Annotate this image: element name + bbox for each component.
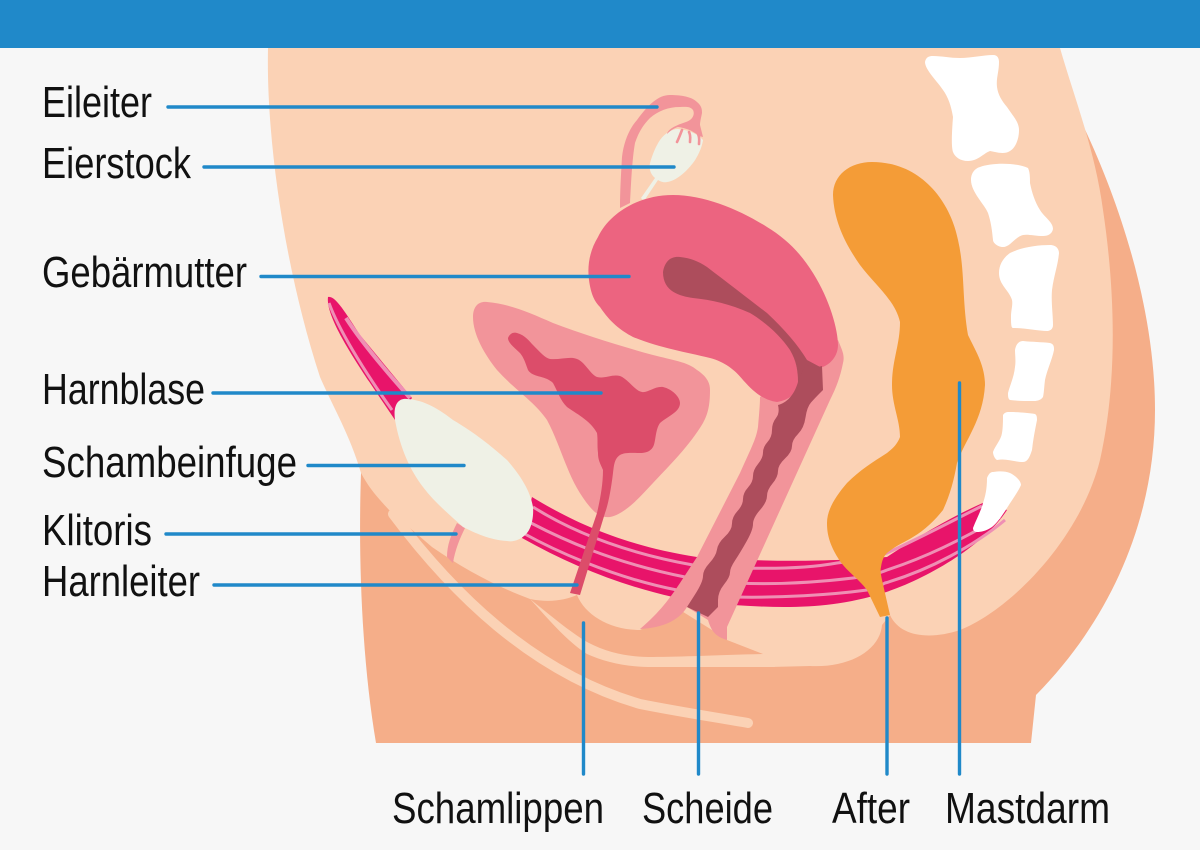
spine bbox=[925, 55, 1059, 532]
fallopian fringes bbox=[677, 130, 699, 144]
label: Klitoris: Klitoris bbox=[42, 506, 152, 555]
label: Mastdarm: Mastdarm bbox=[945, 784, 1110, 833]
rectum bbox=[827, 162, 985, 617]
vagina wall bbox=[640, 340, 844, 640]
leader: Schambeinfuge bbox=[308, 464, 464, 467]
header bar bbox=[0, 0, 1200, 48]
vertebra 5 bbox=[993, 412, 1037, 462]
leader: Harnblase bbox=[213, 391, 601, 395]
label: Harnblase: Harnblase bbox=[42, 365, 205, 414]
leader lines bbox=[166, 107, 960, 774]
leader: Scheide bbox=[697, 613, 700, 774]
body: outer tissue bbox=[360, 115, 1155, 743]
clitoris bbox=[447, 523, 465, 563]
label: Eileiter: Eileiter bbox=[42, 78, 152, 127]
muscle stripes bbox=[523, 506, 1005, 597]
pubic symphysis bbox=[395, 399, 533, 541]
coccyx bbox=[973, 471, 1021, 532]
label: Scheide: Scheide bbox=[642, 784, 773, 833]
body cross-section bbox=[268, 48, 1155, 743]
leader: After bbox=[885, 618, 889, 774]
vertebra 4 bbox=[1008, 341, 1054, 401]
label: Schambeinfuge: Schambeinfuge bbox=[42, 438, 297, 487]
body: inner tissue bbox=[268, 48, 1113, 667]
vertebra 3 bbox=[999, 245, 1059, 331]
leader: Gebärmutter bbox=[261, 275, 629, 278]
leader: Klitoris bbox=[166, 532, 456, 536]
bladder lumen and urethra bbox=[508, 333, 680, 595]
label: Eierstock: Eierstock bbox=[42, 139, 192, 188]
upper muscle stripes bbox=[329, 303, 410, 410]
leader: Mastdarm bbox=[958, 383, 961, 774]
skin fold: inner band bbox=[530, 599, 775, 667]
leader: Schamlippen bbox=[582, 623, 585, 774]
muscle band bbox=[522, 497, 1007, 607]
vagina canal bbox=[687, 364, 823, 617]
leader: Eierstock bbox=[204, 165, 674, 169]
pelvic floor muscle bbox=[328, 297, 1007, 607]
upper muscle bbox=[328, 297, 412, 420]
label: Schamlippen: Schamlippen bbox=[392, 784, 604, 833]
leader: Eileiter bbox=[168, 105, 657, 109]
uterine cavity bbox=[663, 257, 822, 385]
skin fold: outer band bbox=[393, 514, 748, 723]
label: Gebärmutter: Gebärmutter bbox=[42, 248, 247, 297]
ovary bbox=[641, 129, 703, 201]
fallopian tube bbox=[620, 95, 703, 208]
uterus bbox=[588, 195, 838, 402]
vertebra 1 bbox=[925, 55, 1019, 161]
leader: Harnleiter bbox=[214, 583, 577, 587]
label: Harnleiter: Harnleiter bbox=[42, 557, 200, 606]
vertebra 2 bbox=[971, 164, 1053, 247]
label: After: After bbox=[832, 784, 910, 833]
bladder bbox=[473, 302, 710, 595]
